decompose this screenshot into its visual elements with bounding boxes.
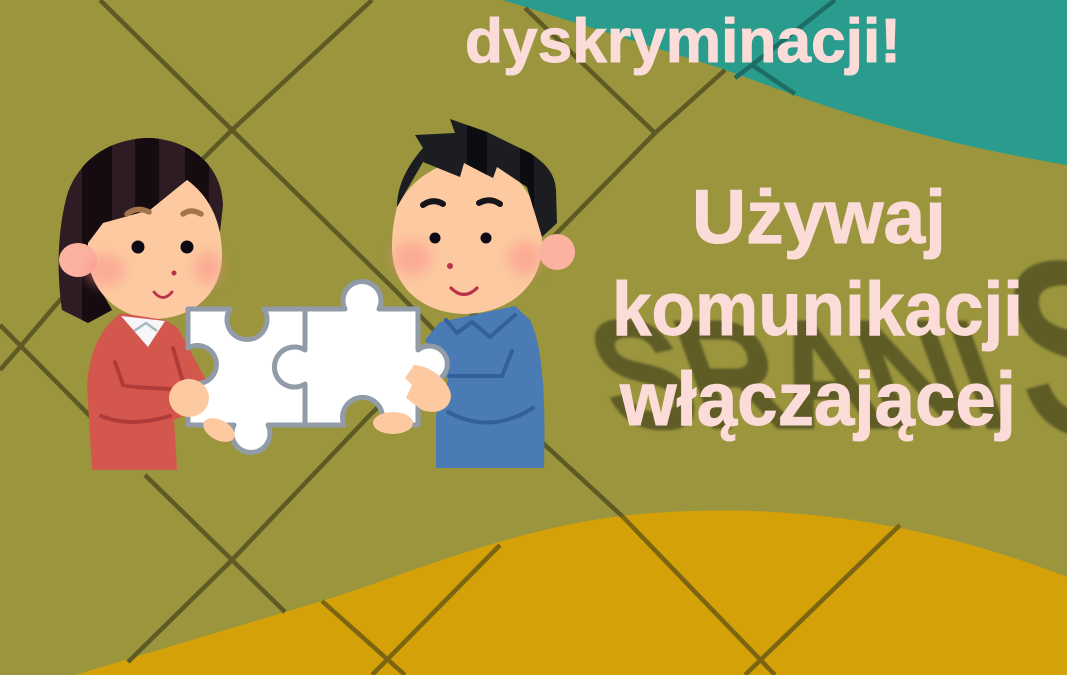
floor grid lines on yellow xyxy=(322,516,900,675)
right puzzle piece xyxy=(274,282,447,425)
left puzzle piece xyxy=(188,309,305,452)
yellow wave bottom xyxy=(75,510,1067,675)
man ear xyxy=(539,234,575,270)
woman nose xyxy=(172,270,176,276)
floor grid lines on teal xyxy=(735,0,835,94)
floor grid lines on olive xyxy=(0,0,725,662)
illustration: woman xyxy=(50,130,230,470)
man eyebrows xyxy=(423,200,500,205)
faint background lettering: SRANI xyxy=(570,293,1024,456)
woman sweater xyxy=(87,313,207,470)
man hands xyxy=(373,365,451,434)
man nose xyxy=(447,263,453,269)
line 2: komunikacji xyxy=(612,267,1023,352)
man sweater xyxy=(425,306,544,468)
woman ear xyxy=(59,243,97,277)
man collar and folds xyxy=(446,315,533,423)
woman eyebrows xyxy=(127,209,201,214)
heading fragment: dyskryminacji! xyxy=(465,7,901,76)
woman hair xyxy=(58,138,223,323)
illustration: puzzle pieces xyxy=(188,282,447,452)
main message xyxy=(612,175,1023,442)
illustration: man xyxy=(390,110,575,468)
man face xyxy=(392,160,542,314)
line 3: włączającej xyxy=(619,357,1016,442)
woman hands xyxy=(169,379,239,447)
man cheeks xyxy=(392,241,542,275)
woman collar xyxy=(121,316,165,347)
man mouth xyxy=(451,288,477,294)
man hair xyxy=(397,119,557,237)
man eyes xyxy=(430,232,492,244)
woman mouth xyxy=(154,292,172,298)
woman eyes xyxy=(132,240,194,254)
faint background lettering xyxy=(570,215,1067,483)
line 1: Używaj xyxy=(692,175,946,260)
woman face xyxy=(88,180,222,319)
woman cheeks xyxy=(85,252,222,286)
teal wave top right xyxy=(503,0,1067,165)
woman sweater folds xyxy=(101,348,183,422)
